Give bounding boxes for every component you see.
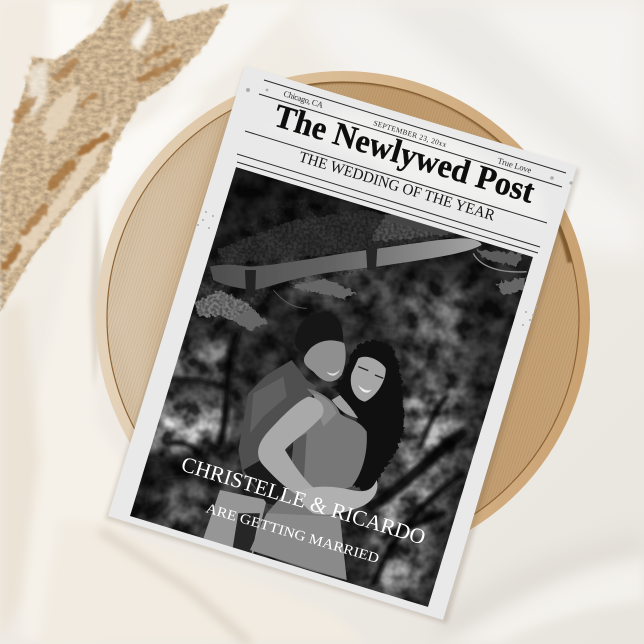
card shadow xyxy=(105,68,580,624)
gaps between fronds xyxy=(28,0,152,120)
background bokeh tones xyxy=(130,260,470,600)
masthead title: The Newlywed Post xyxy=(270,98,539,211)
black and white couple photo xyxy=(120,160,540,620)
couple xyxy=(203,312,404,580)
masthead top rules xyxy=(237,80,566,253)
newspaper card xyxy=(105,66,580,624)
dateline right: motto: True Love xyxy=(496,155,533,175)
headline: THE WEDDING OF THE YEAR xyxy=(297,149,497,225)
hands xyxy=(298,480,377,515)
wooden round plate xyxy=(96,71,590,565)
pampas dark streaks xyxy=(3,4,178,268)
decorative dots xyxy=(197,88,573,326)
pampas tuft texture xyxy=(0,0,240,320)
woman's face xyxy=(351,357,386,402)
plate inner face xyxy=(107,82,579,554)
plate rim xyxy=(96,71,590,565)
woman's dress xyxy=(250,388,367,580)
background mottling xyxy=(120,160,540,620)
foliage specks xyxy=(194,211,442,320)
pampas grass xyxy=(0,0,240,320)
man's shirt xyxy=(238,360,317,500)
man's hair xyxy=(295,312,343,355)
card paper xyxy=(108,66,577,620)
man's face xyxy=(304,340,346,382)
tree branch xyxy=(210,238,527,308)
man's trousers xyxy=(203,490,267,553)
dateline left: city: Chicago, CA xyxy=(282,88,325,110)
foliage xyxy=(193,210,527,330)
woman's shoulder and arm xyxy=(258,397,324,500)
pampas light highlights xyxy=(5,85,120,280)
pampas plume body xyxy=(0,0,230,312)
photo backdrop xyxy=(130,167,533,607)
dateline centre: date: SEPTEMBER 23, 20xx xyxy=(372,118,448,149)
woman's hair xyxy=(333,340,404,490)
couple names: CHRISTELLE & RICARDO xyxy=(179,452,428,549)
announcement line: ARE GETTING MARRIED xyxy=(204,501,381,567)
